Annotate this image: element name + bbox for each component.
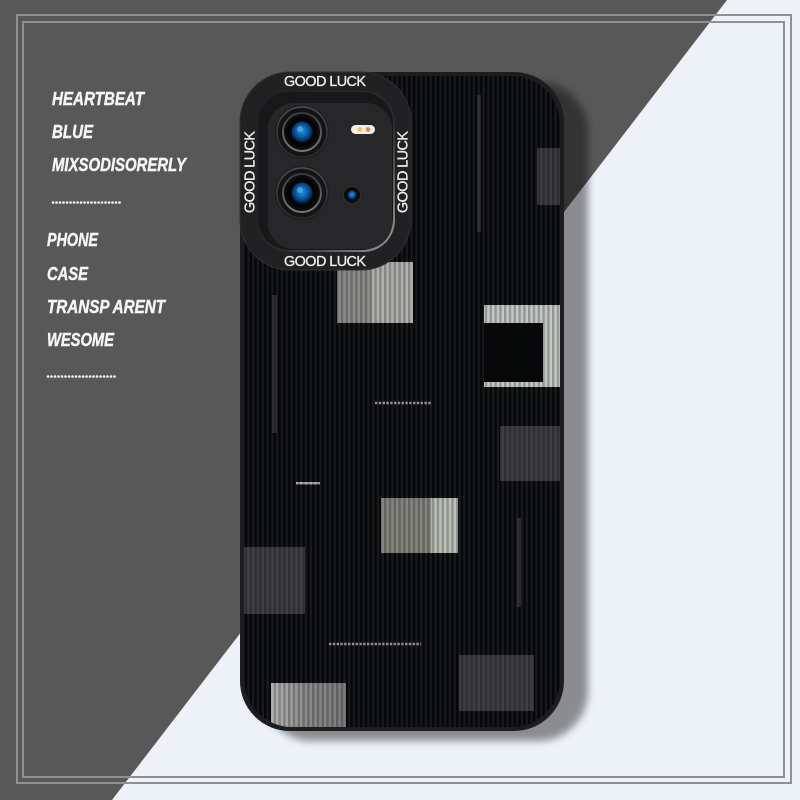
lens bottom (275, 166, 329, 220)
word: wesome: WESOME (47, 330, 115, 350)
dotted line lower (329, 643, 421, 645)
camera module (240, 72, 412, 270)
vertical bar top (477, 95, 481, 232)
small lens (344, 186, 360, 204)
label bottom: GOOD LUCK (284, 254, 366, 270)
label top: GOOD LUCK (284, 74, 366, 90)
word: case: CASE (47, 264, 89, 284)
lens top (275, 105, 329, 159)
word: heartbeat: HEARTBEAT (52, 89, 146, 109)
grey patch lower right (459, 655, 534, 711)
dotted line upper (375, 402, 431, 404)
dark bracket interior (484, 323, 543, 382)
camera window rim (257, 91, 395, 252)
grey patch top right (537, 148, 560, 205)
phone shadow (262, 82, 588, 741)
dotted divider (53, 201, 121, 204)
label right: GOOD LUCK (396, 131, 412, 213)
grey patch right (500, 426, 560, 481)
flash (351, 125, 375, 134)
dotted divider lower (48, 375, 116, 378)
word: phone: PHONE (47, 230, 99, 250)
phone case (240, 72, 564, 731)
word: mixsodisorerly: MIXSODISORERLY (52, 155, 188, 175)
label left: GOOD LUCK (242, 131, 258, 213)
grey patch left (244, 547, 305, 614)
camera island (240, 72, 411, 270)
camera window (258, 92, 393, 250)
light patch bottom (271, 683, 346, 727)
bracket shape (484, 305, 560, 387)
stripe overlay (244, 76, 560, 727)
short dash (296, 482, 320, 484)
camera inner plate (268, 103, 392, 249)
striped back surface (244, 76, 560, 727)
light patch centre (381, 498, 458, 553)
vertical bar lower right (517, 518, 521, 607)
vertical bar left (272, 295, 277, 433)
word: blue: BLUE (52, 122, 94, 142)
word: transp arent: TRANSP ARENT (47, 297, 167, 317)
light patch under camera (337, 262, 413, 323)
case rim (240, 72, 564, 731)
text block: product words (47, 89, 188, 376)
